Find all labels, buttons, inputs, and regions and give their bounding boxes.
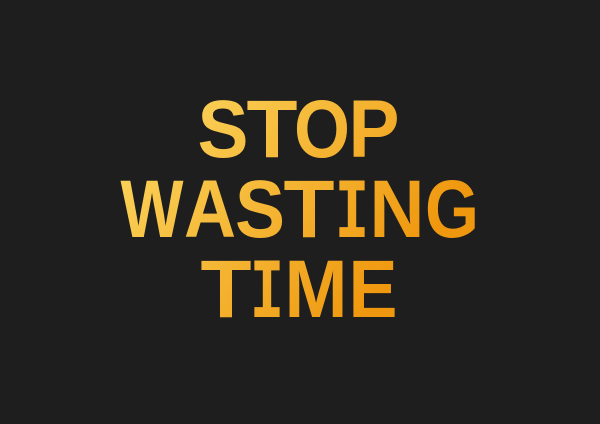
- title: STOP WASTING TIME: [120, 84, 479, 336]
- title: STOP WASTING TIME: A: [184, 164, 236, 255]
- title: STOP WASTING TIME: W: [120, 164, 184, 255]
- title: STOP WASTING TIME: T: [284, 164, 334, 255]
- title: STOP WASTING TIME: S: [235, 164, 285, 255]
- title: STOP WASTING TIME: O: [294, 84, 350, 175]
- title: STOP WASTING TIME: I: [334, 166, 370, 256]
- title: STOP WASTING TIME: T: [246, 84, 298, 175]
- title: STOP WASTING TIME: E: [348, 244, 398, 335]
- title: STOP WASTING TIME: M: [284, 244, 348, 335]
- title: STOP WASTING TIME: P: [348, 84, 400, 175]
- title: STOP WASTING TIME: S: [198, 84, 248, 175]
- title: STOP WASTING TIME: N: [370, 164, 424, 255]
- title: STOP WASTING TIME: G: [425, 164, 479, 255]
- title: STOP WASTING TIME: T: [200, 244, 252, 335]
- title: STOP WASTING TIME: I: [250, 246, 284, 336]
